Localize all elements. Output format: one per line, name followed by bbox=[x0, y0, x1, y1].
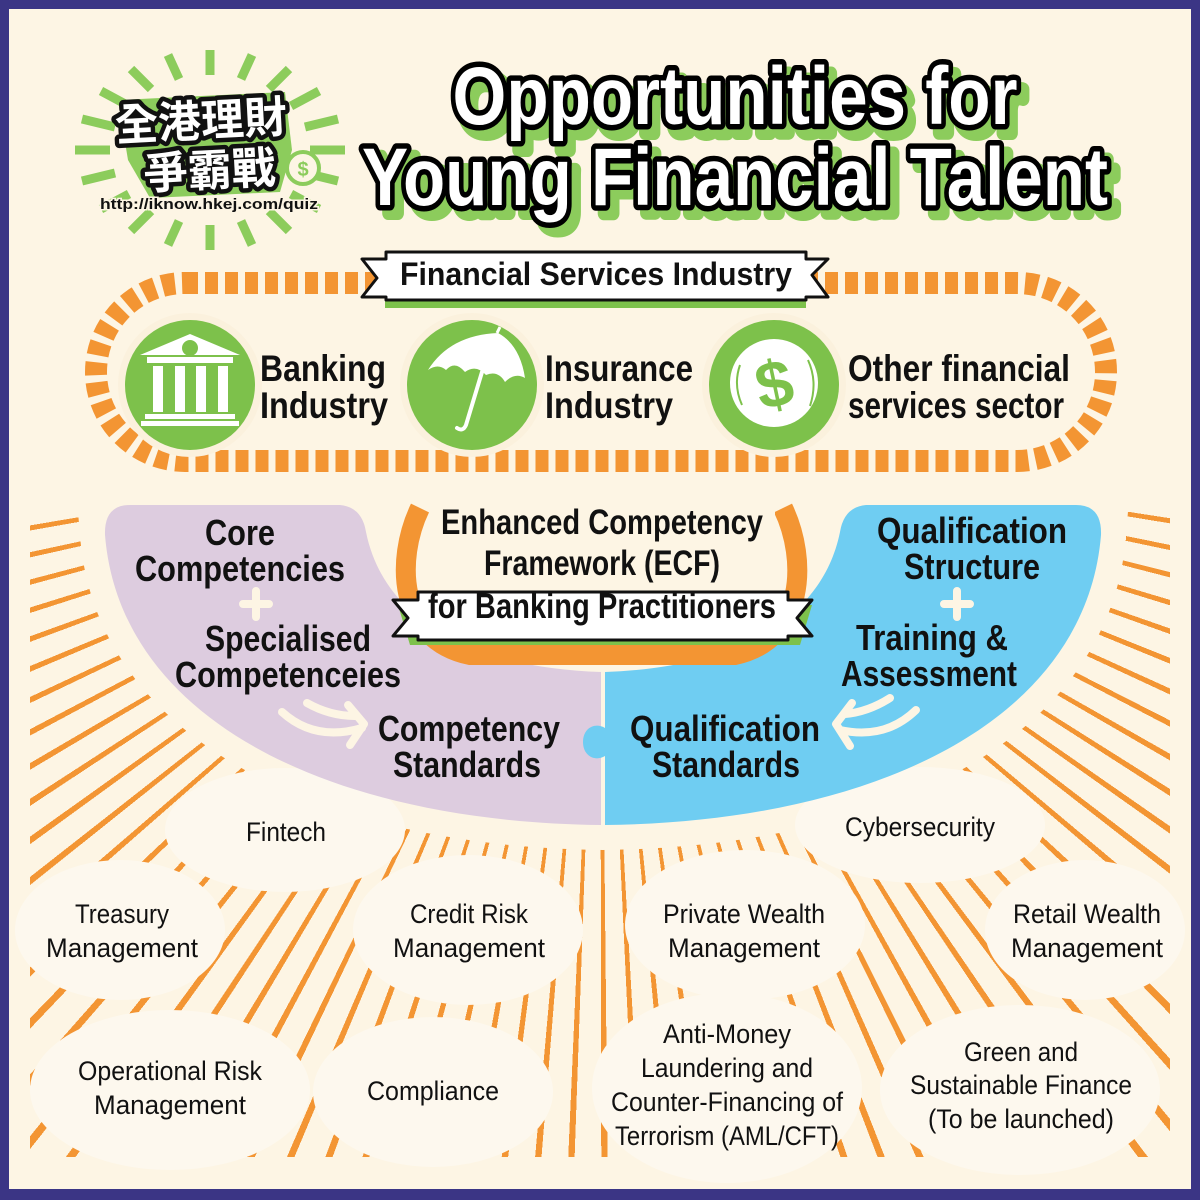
label: AML/CFT: Laundering and bbox=[641, 1053, 813, 1083]
logo: 全港理財爭霸戰 bbox=[75, 50, 345, 250]
text: qualification structure + training: Assessment bbox=[841, 653, 1017, 694]
label: Green and Sustainable Finance: Sustainable Finance bbox=[910, 1070, 1132, 1100]
label: Operational Risk Management bbox=[78, 1056, 262, 1120]
label: AML/CFT bbox=[611, 1019, 843, 1151]
label: Treasury Management: Treasury bbox=[75, 899, 169, 929]
text: Banking Industry: Industry bbox=[260, 385, 388, 426]
text: competency standards: Standards bbox=[393, 744, 541, 785]
text: Banking Industry: Banking bbox=[260, 348, 386, 389]
label: Treasury Management bbox=[46, 899, 198, 963]
text: core + specialised: Competencies bbox=[135, 548, 345, 589]
label: Credit Risk Management bbox=[393, 899, 545, 963]
text: qualification structure + training bbox=[841, 510, 1067, 694]
text: core + specialised: Competenceies bbox=[175, 654, 401, 695]
banner: for Banking Practitioners: for Banking Practitioners bbox=[428, 587, 776, 626]
text: qualification structure + training: Structure bbox=[904, 546, 1040, 587]
label: Compliance: Compliance bbox=[367, 1076, 499, 1106]
icon: dollar bbox=[702, 313, 846, 457]
arrow: to competency standards bbox=[282, 703, 364, 745]
text: Insurance Industry: Industry bbox=[545, 385, 673, 426]
label: Credit Risk Management: Management bbox=[393, 933, 545, 963]
panel: qualification (blue) bbox=[583, 505, 1101, 825]
label: AML/CFT: Anti-Money bbox=[663, 1019, 791, 1049]
icon: plus bbox=[243, 591, 269, 617]
title: Opportunities for bbox=[460, 60, 1024, 151]
label: Green and Sustainable Finance: (To be launched) bbox=[928, 1104, 1114, 1134]
label: Fintech: Fintech bbox=[246, 817, 326, 847]
bottom labels bbox=[46, 812, 1163, 1151]
label: Credit Risk Management: Credit Risk bbox=[410, 899, 528, 929]
label: Green and Sustainable Finance: Green and bbox=[964, 1037, 1078, 1067]
icon: bank bbox=[118, 313, 262, 457]
label: Cybersecurity: Cybersecurity bbox=[845, 812, 995, 842]
label: Retail Wealth Management: Management bbox=[1011, 933, 1163, 963]
label: Private Wealth Management: Management bbox=[668, 933, 820, 963]
text: qualification structure + training: Training & bbox=[856, 617, 1008, 658]
label: AML/CFT: Counter-Financing of bbox=[611, 1087, 843, 1117]
text: Other financial services sector: services sector bbox=[848, 385, 1064, 426]
icon: dollar: $ bbox=[749, 344, 800, 424]
label: Operational Risk Management: Management bbox=[94, 1090, 246, 1120]
text: qualification standards: Standards bbox=[652, 744, 800, 785]
text: qualification standards bbox=[630, 708, 820, 785]
text: qualification structure + training: Qualification bbox=[877, 510, 1067, 551]
blobs behind bottom labels bbox=[15, 767, 1185, 1183]
label: Green and Sustainable Finance bbox=[910, 1037, 1132, 1134]
arrow: to qualification standards bbox=[836, 698, 916, 746]
text: core + specialised: Specialised bbox=[205, 618, 371, 659]
text: Banking Industry bbox=[260, 348, 388, 426]
cream mask around bowl bbox=[80, 500, 1126, 825]
text: Insurance Industry bbox=[545, 348, 693, 426]
label: Private Wealth Management: Private Wealth bbox=[663, 899, 825, 929]
title: Opportunities for bbox=[452, 51, 1018, 142]
text: Other financial services sector bbox=[848, 348, 1070, 426]
text: competency standards bbox=[378, 708, 560, 785]
label: AML/CFT: Terrorism (AML/CFT) bbox=[615, 1121, 839, 1151]
text: ECF title bbox=[441, 503, 763, 583]
panel: financial services industry bbox=[96, 252, 1106, 461]
label: Retail Wealth Management: Retail Wealth bbox=[1013, 899, 1161, 929]
panel: competency (purple) bbox=[105, 505, 601, 825]
title bbox=[362, 51, 1116, 231]
text: core + specialised bbox=[135, 512, 401, 695]
text: qualification standards: Qualification bbox=[630, 708, 820, 749]
logo: 全港理財爭霸戰: http://iknow.hkej.com/quiz bbox=[100, 196, 318, 213]
text: competency standards: Competency bbox=[378, 708, 560, 749]
banner: Financial Services Industry bbox=[362, 252, 828, 308]
label: Retail Wealth Management bbox=[1011, 899, 1163, 963]
text: ECF title: Enhanced Competency bbox=[441, 503, 763, 542]
text: core + specialised: Core bbox=[205, 512, 275, 553]
icon: dollar bulb bbox=[287, 152, 319, 184]
icon: plus bbox=[944, 591, 970, 617]
text: Other financial services sector: Other financial bbox=[848, 348, 1070, 389]
text: ECF title: Framework (ECF) bbox=[484, 544, 720, 583]
text: Insurance Industry: Insurance bbox=[545, 348, 693, 389]
logo: 全港理財爭霸戰: 全港理財 bbox=[114, 93, 288, 151]
icon: umbrella bbox=[400, 313, 544, 457]
banner: Financial Services Industry: Financial Services Industry bbox=[400, 256, 792, 292]
panel: ECF bbox=[393, 503, 812, 655]
logo: 全港理財爭霸戰: 爭霸戰 bbox=[142, 144, 277, 199]
label: Private Wealth Management bbox=[663, 899, 825, 963]
label: Treasury Management: Management bbox=[46, 933, 198, 963]
label: Operational Risk Management: Operational Risk bbox=[78, 1056, 262, 1086]
banner: for Banking Practitioners bbox=[393, 587, 812, 645]
icon: dollar bulb: $ bbox=[297, 159, 309, 181]
icon: puzzle knob bbox=[583, 726, 605, 758]
